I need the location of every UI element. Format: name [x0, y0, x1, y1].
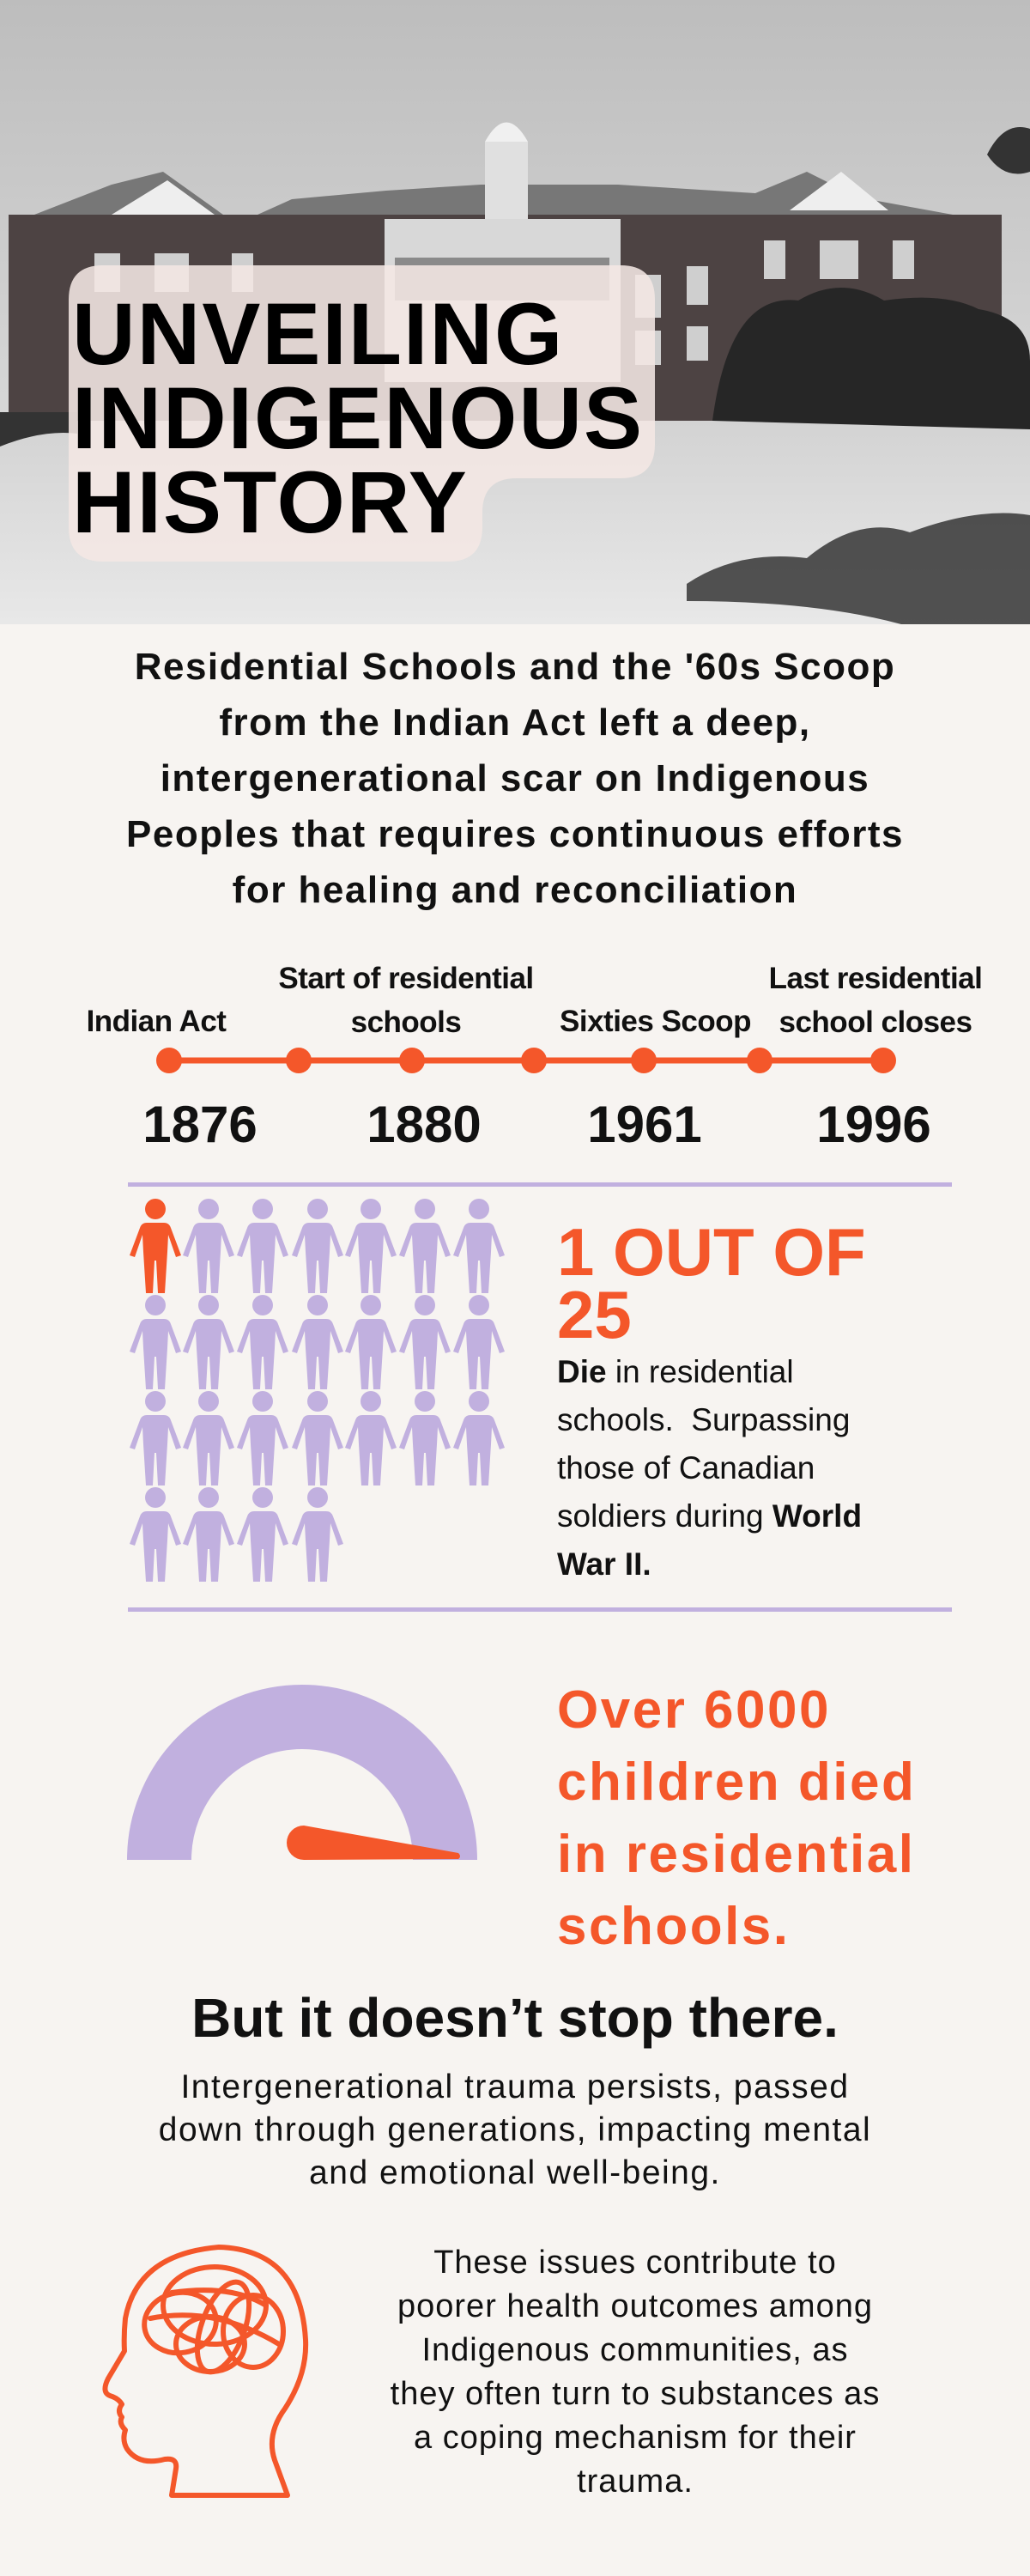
stat: over 6000: schools.	[557, 1897, 791, 1956]
heading: but it doesn't stop there: But it doesn’t stop there.	[191, 1987, 839, 2049]
paragraph: intergenerational trauma: and emotional well-being.	[309, 2154, 721, 2191]
gauge chart	[127, 1685, 477, 1860]
stat: over 6000: Over 6000	[557, 1680, 831, 1740]
timeline: schools	[351, 1005, 461, 1039]
intro text: Peoples that requires continuous efforts	[126, 813, 904, 855]
intro text: intergenerational scar on Indigenous	[161, 757, 869, 799]
title: HISTORY	[72, 453, 469, 551]
paragraph: intergenerational trauma	[159, 2069, 871, 2191]
intro text	[126, 646, 904, 911]
paragraph: health outcomes: Indigenous communities, as	[421, 2332, 849, 2368]
stat: over 6000: children died	[557, 1753, 916, 1812]
paragraph: health outcomes: trauma.	[577, 2464, 694, 2500]
intro text: from the Indian Act left a deep,	[219, 702, 811, 744]
paragraph: health outcomes: These issues contribute to	[433, 2245, 837, 2281]
timeline: 1961	[587, 1096, 702, 1153]
timeline: Last residential	[769, 962, 982, 995]
years: 1876	[142, 1096, 258, 1153]
timeline: 1880	[367, 1096, 482, 1153]
stat: 1 out of 25: 1 OUT OF	[557, 1214, 866, 1290]
paragraph: health outcomes: a coping mechanism for their	[414, 2420, 857, 2456]
timeline line with dots	[156, 1048, 896, 1073]
stat: 1 out of 25	[557, 1214, 866, 1352]
timeline: 1996	[816, 1096, 931, 1153]
timeline	[87, 962, 982, 1153]
title box	[69, 265, 655, 562]
intro text: Residential Schools and the '60s Scoop	[135, 646, 895, 688]
stat description	[557, 1354, 862, 1582]
stat description: schools. Surpassing	[557, 1402, 850, 1437]
stat description: War II.	[557, 1546, 651, 1582]
timeline labels: Indian Act	[87, 1005, 226, 1038]
timeline: school closes	[779, 1005, 972, 1039]
icon: head with tangled brain	[102, 2245, 309, 2498]
stat: over 6000	[557, 1680, 916, 1956]
paragraph: health outcomes: poorer health outcomes among	[397, 2288, 873, 2324]
stat: 1 out of 25: 25	[557, 1277, 632, 1352]
stat: over 6000: in residential	[557, 1825, 915, 1884]
paragraph: health outcomes: they often turn to substances as	[391, 2376, 880, 2412]
title	[72, 285, 644, 551]
stat description: those of Canadian	[557, 1450, 815, 1485]
timeline: Start of residential	[278, 962, 534, 995]
timeline: Sixties Scoop	[560, 1005, 751, 1038]
stat description: Die in residential	[557, 1354, 794, 1389]
title: UNVEILING	[72, 285, 564, 383]
paragraph: intergenerational trauma: Intergenerational trauma persists, passed	[180, 2069, 850, 2105]
paragraph: intergenerational trauma: down through generations, impacting mental	[159, 2111, 871, 2148]
people pictogram	[130, 1199, 505, 1582]
stat description: soldiers during World	[557, 1498, 862, 1534]
header photo	[0, 0, 1030, 624]
intro text: for healing and reconciliation	[233, 869, 797, 911]
paragraph: health outcomes	[391, 2245, 880, 2500]
title: INDIGENOUS	[72, 369, 644, 467]
